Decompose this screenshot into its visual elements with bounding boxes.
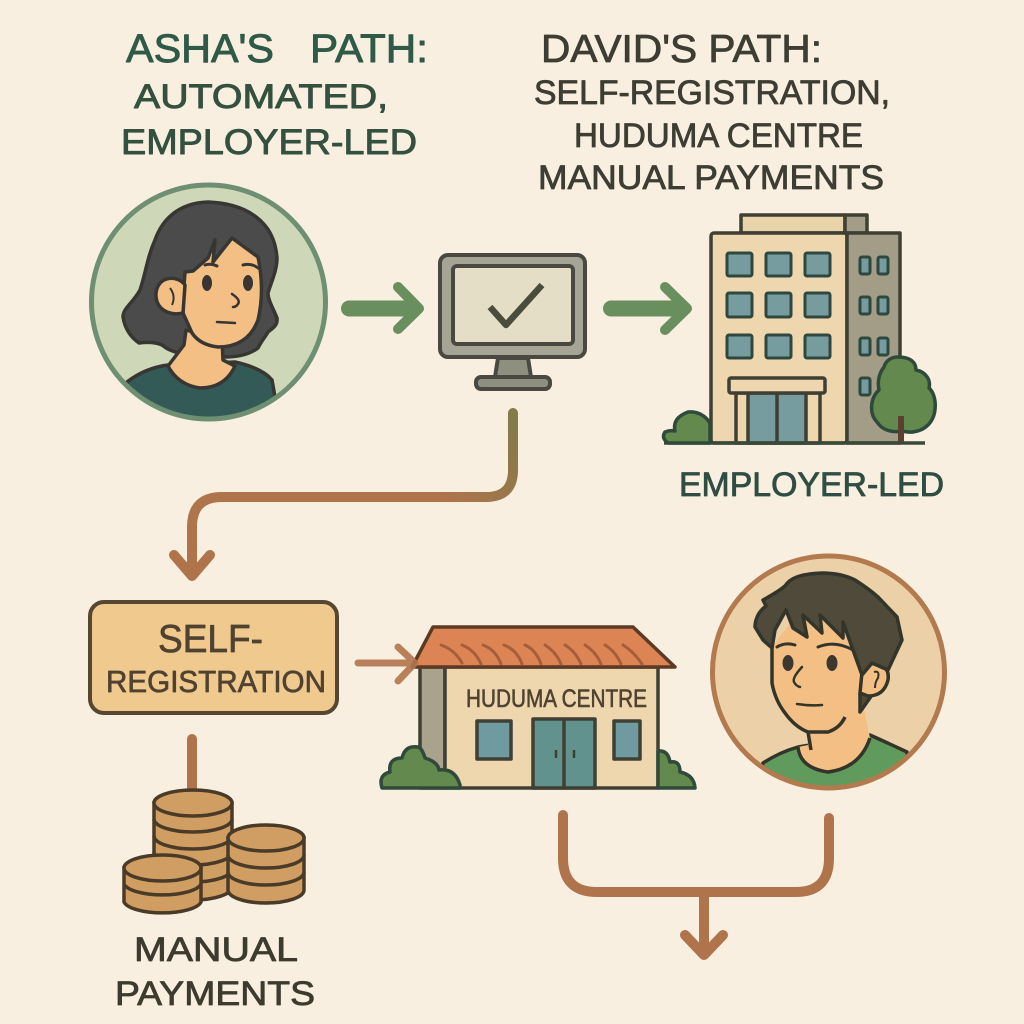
heading: Asha's path [121,27,428,162]
arrow: converging paths [563,815,829,955]
heading: Asha's path: ASHA'S [126,27,274,71]
arrow: Asha to computer [349,287,419,329]
arrow: computer down to self-registration [174,413,513,576]
icon: Huduma centre building [381,627,695,788]
heading: David's path: DAVID'S PATH: [541,28,822,71]
box: self-registration: SELF- [158,618,263,661]
arrow: computer to employer [611,287,687,330]
connector: self-registration to coins [187,739,197,790]
icon: Asha portrait [92,185,326,425]
arrow: self-registration to Huduma centre [358,647,415,681]
heading: David's path: MANUAL PAYMENTS [538,159,884,197]
icon: Huduma centre building: HUDUMA CENTRE [466,685,647,713]
heading: David's path: HUDUMA CENTRE [574,117,863,155]
label: manual payments [115,931,315,1013]
heading: Asha's path: EMPLOYER-LED [121,123,417,162]
icon: David portrait [712,556,944,800]
heading: David's path [534,28,890,197]
icon: computer with checkmark [440,255,585,389]
box: self-registration [90,602,337,713]
heading: Asha's path: AUTOMATED, [134,78,388,116]
label: employer-led: EMPLOYER-LED [679,466,944,504]
box: self-registration: REGISTRATION [106,664,326,699]
label: manual payments: MANUAL [134,931,298,969]
icon: employer office building [664,215,935,443]
label: manual payments: PAYMENTS [115,975,315,1013]
heading: Asha's path: PATH: [310,27,428,71]
heading: David's path: SELF-REGISTRATION, [534,74,890,112]
icon: stacks of coins [124,790,304,913]
